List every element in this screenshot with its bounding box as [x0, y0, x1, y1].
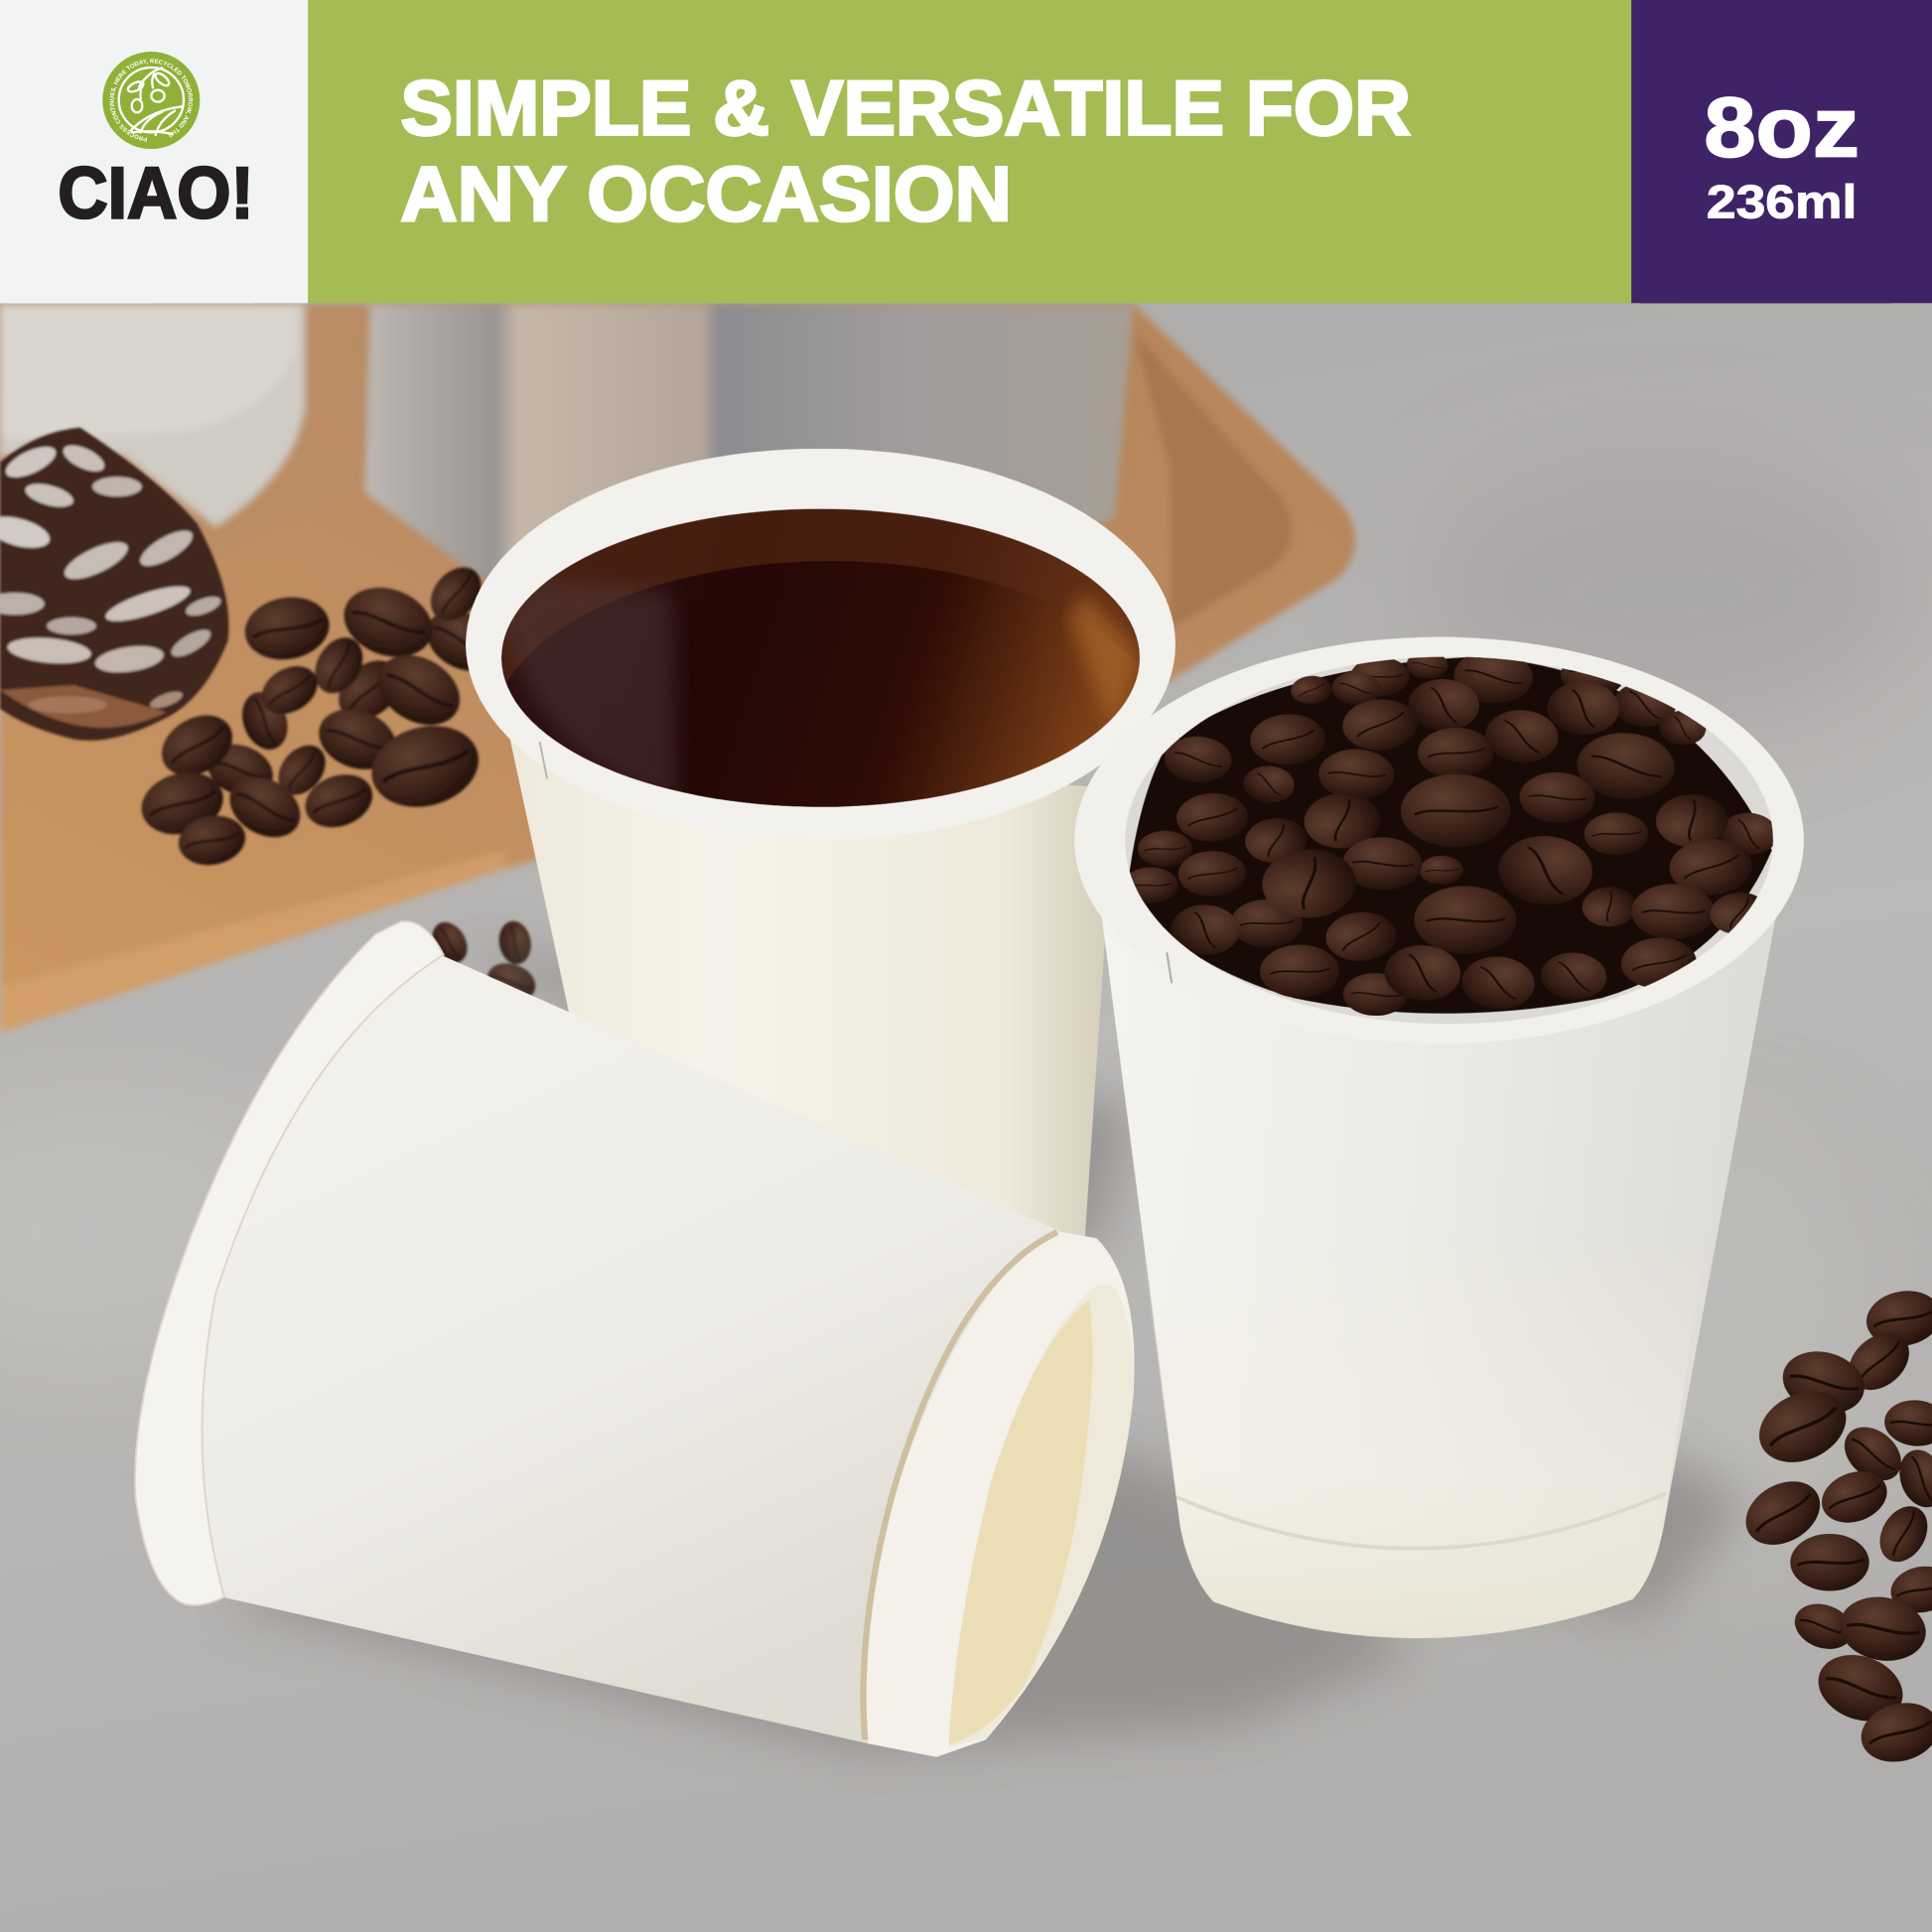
- rim seam: coffee cup: [540, 742, 547, 778]
- cup rim: beans cup: [1074, 637, 1804, 1043]
- coffee beans on tray: [135, 557, 541, 1008]
- cup body: beans cup: [1100, 905, 1777, 1638]
- cup lying on its side: [135, 921, 1135, 1757]
- sleeve step: lying cup: [865, 1232, 1135, 1757]
- wooden tray: [0, 305, 1355, 1033]
- sleeve groove: lying cup: [864, 1232, 1057, 1739]
- cup with black coffee: [466, 449, 1175, 1247]
- cup body: coffee cup: [510, 740, 1115, 1247]
- base sleeve line: beans cup: [1176, 1493, 1666, 1549]
- rim seam: beans cup: [1167, 952, 1172, 983]
- rolled rim: lying cup: [135, 921, 444, 1605]
- title: ANY OCCASION: [400, 150, 1012, 237]
- shadows on table: [221, 936, 1749, 1749]
- white mug, top left: [0, 305, 306, 527]
- open base interior: lying cup: [949, 1300, 1092, 1744]
- cup base shading: beans cup: [1140, 1232, 1707, 1638]
- beans inside cup: [1124, 641, 1786, 1020]
- logo: wordmark: CIAO!: [58, 153, 254, 234]
- cup interior wall: beans cup: [1125, 656, 1773, 1024]
- header: title band: [308, 0, 1631, 303]
- black coffee surface: [501, 505, 1140, 807]
- cup body: lying cup: [202, 955, 1062, 1743]
- cup with coffee beans: [1074, 637, 1804, 1638]
- title: [400, 64, 1411, 237]
- size: ounces: 8oz: [1704, 80, 1860, 176]
- logo: circular emblem: PROCESS CONTINUES, HERE TODAY, RECYCLED TOMORROW, AND THE: [109, 59, 193, 142]
- corrugated lining ring: lying cup: [949, 1286, 1134, 1747]
- pinecone: [0, 428, 228, 741]
- size: millilitres: 236ml: [1707, 176, 1857, 228]
- cup rim: coffee cup: [466, 449, 1175, 840]
- scattered coffee beans, right edge: [1734, 1285, 1932, 1770]
- header: size panel: [1631, 0, 1932, 303]
- title: SIMPLE & VERSATILE FOR: [400, 64, 1411, 151]
- metal kettle behind cups: [364, 305, 1134, 579]
- header: logo panel: [0, 0, 308, 303]
- table highlights: [0, 456, 1910, 1578]
